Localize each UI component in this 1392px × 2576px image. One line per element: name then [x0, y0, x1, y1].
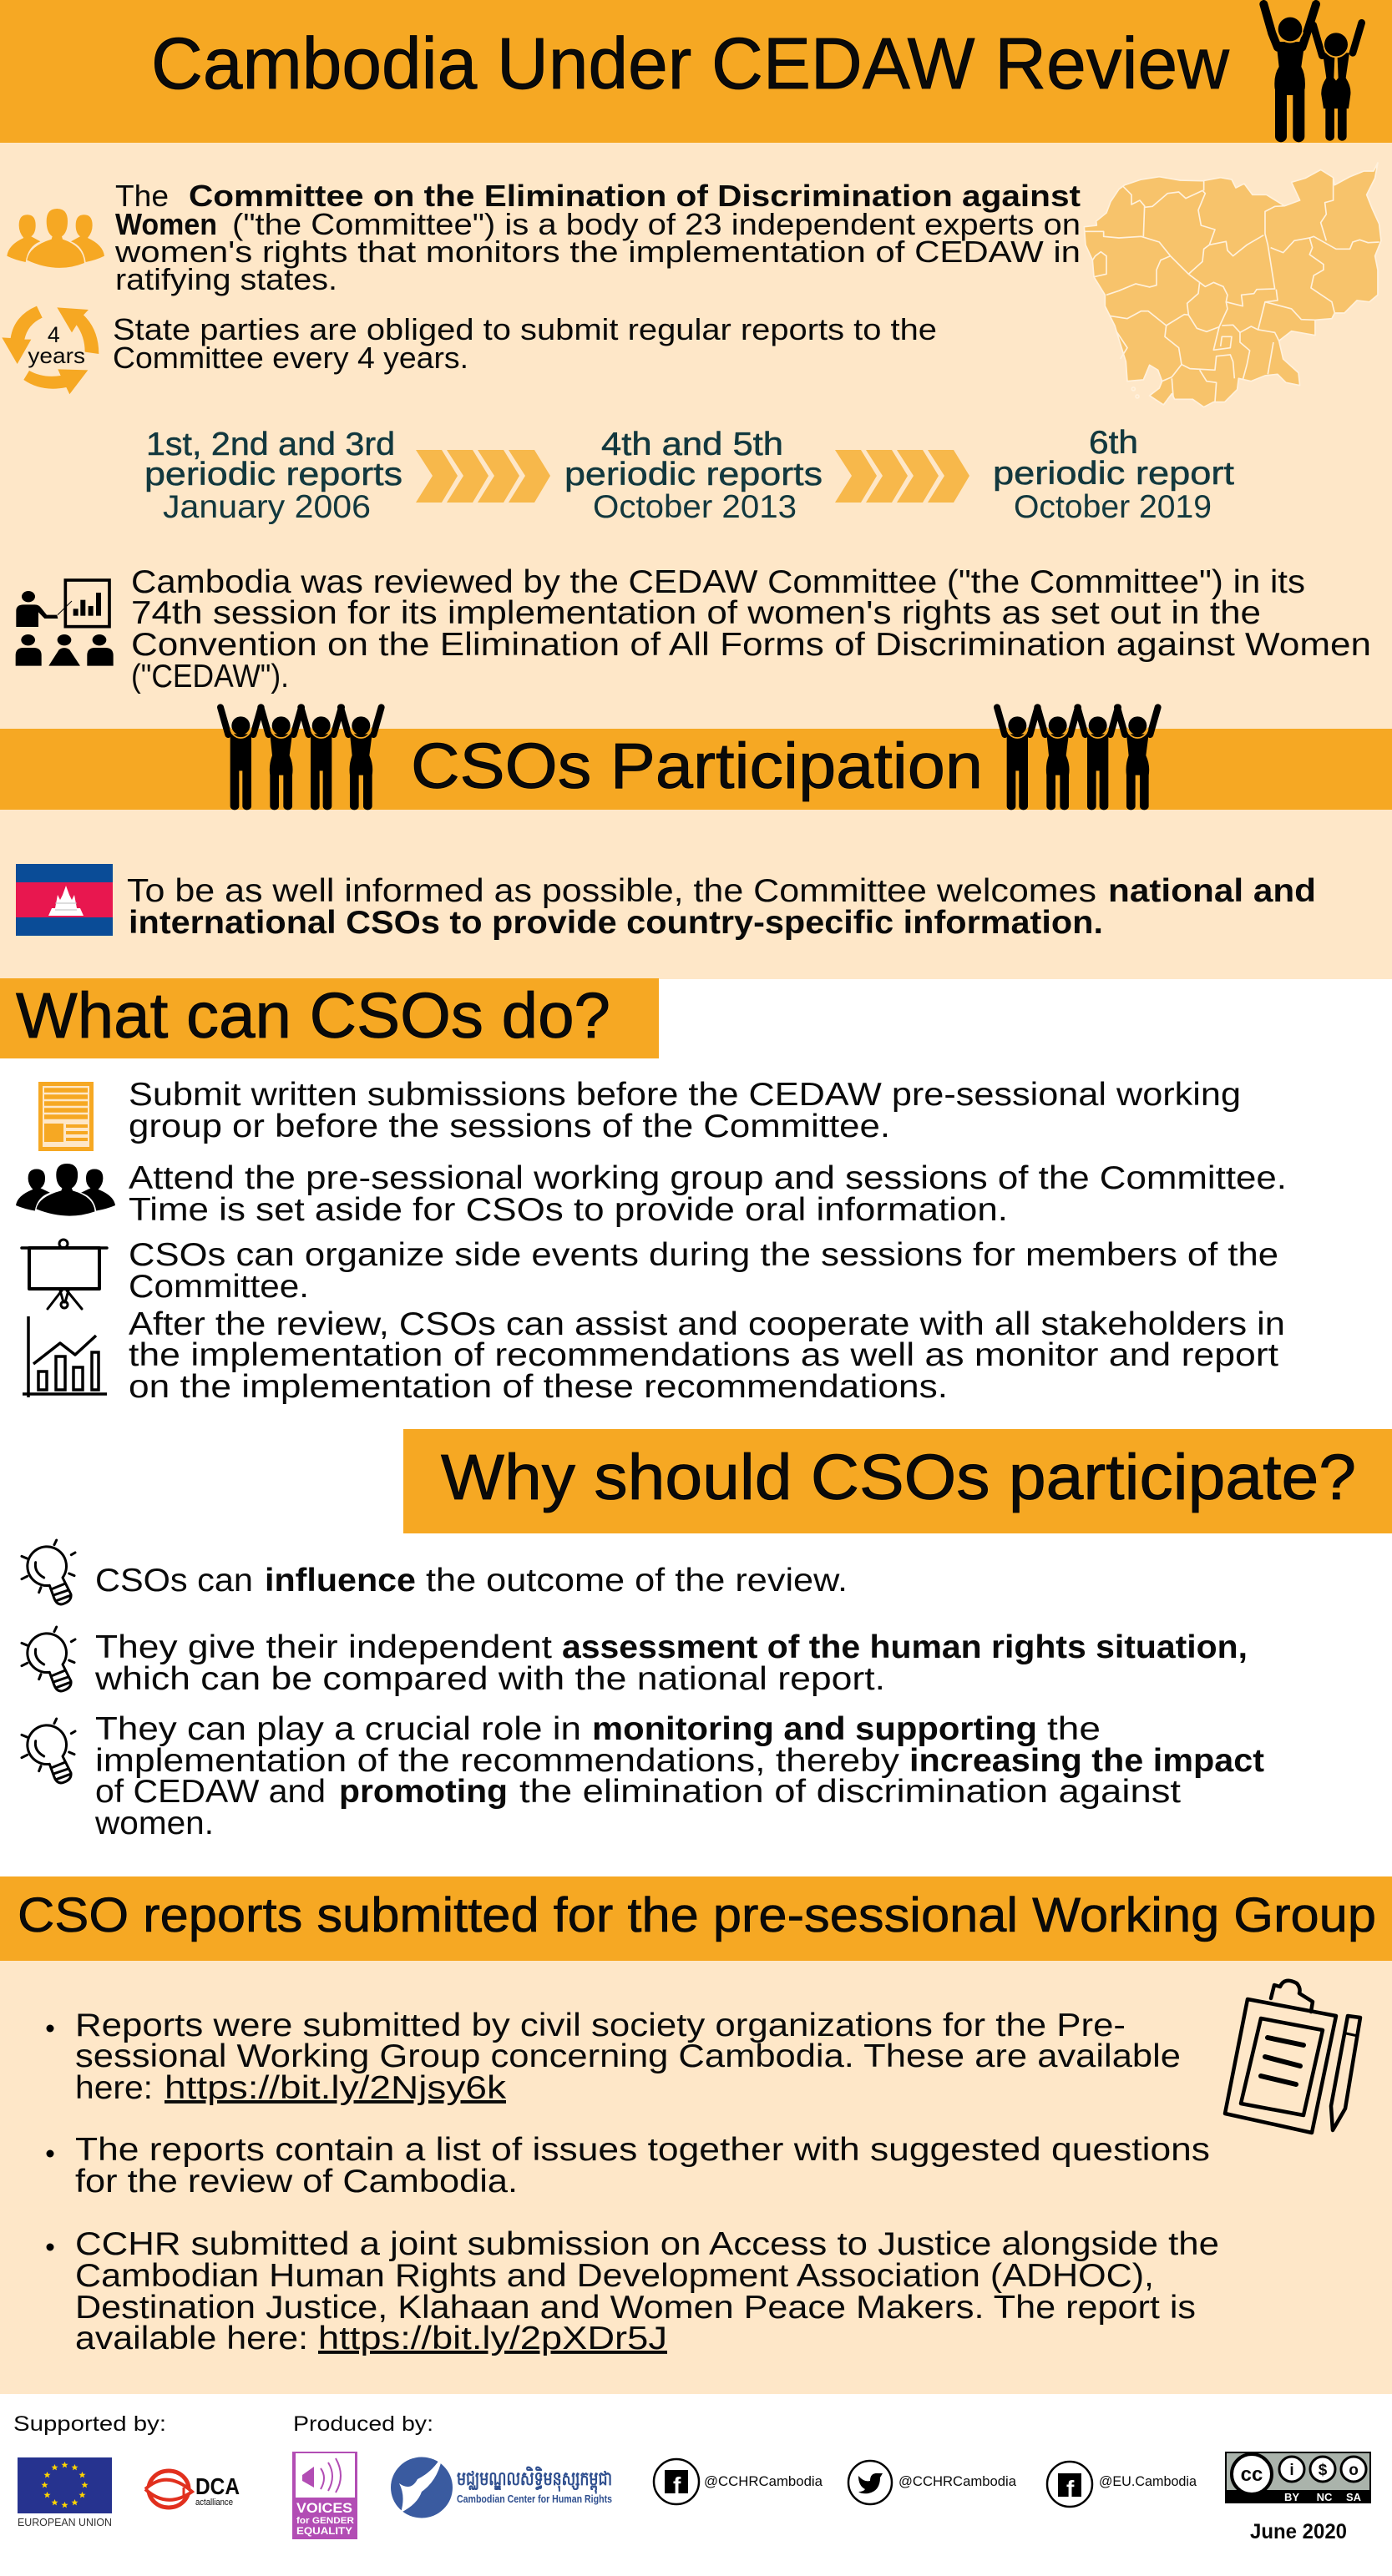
icon: four-year cycle	[2, 306, 99, 394]
text: committee description: ratifying states.	[115, 262, 337, 296]
text: produced by: Produced by:	[293, 2412, 433, 2436]
text: after the review	[129, 1306, 1285, 1405]
list: reports submitted	[47, 2008, 1181, 2106]
text: after the review: After the review, CSOs can assist and cooperate with all stakeholders in	[129, 1306, 1285, 1342]
timeline: reports 4 and 5	[564, 427, 823, 525]
icon: presentation and audience	[16, 580, 114, 666]
badge: Creative Commons BY NC SA: cc	[1241, 2463, 1263, 2486]
arrow: chevrons one	[416, 450, 550, 503]
text: attend sessions: Attend the pre-sessional working group and sessions of the Committee.	[129, 1160, 1287, 1196]
timeline: report 6: periodic report	[993, 456, 1234, 492]
banner: Why should CSOs participate	[403, 1429, 1392, 1533]
text: committee description: ("the Committee") is a body of 23 independent experts on	[232, 207, 1081, 241]
logo: European Union	[18, 2457, 112, 2528]
text: monitoring and supporting: the elimination of discrimination against	[519, 1774, 1181, 1810]
text: independent assessment: which can be compared with the national report.	[94, 1661, 885, 1697]
text: independent assessment: assessment of the human rights situation,	[562, 1629, 1248, 1665]
heading: CSOs Participation	[411, 730, 983, 802]
badge: Creative Commons BY NC SA: o	[1349, 2462, 1359, 2479]
list: CCHR joint submission: available here:	[75, 2321, 308, 2356]
text: committee welcomes information: national and	[1108, 873, 1316, 909]
timeline: reports 1 to 3	[144, 427, 402, 525]
logo: Voices for Gender Equality: VOICES	[296, 2500, 352, 2516]
text: after the review: the implementation of recommendations as well as monitor and report	[129, 1337, 1278, 1373]
text: review description: Convention on the Elimination of All Forms of Discrimination against Women	[131, 627, 1371, 663]
map of Cambodia	[1084, 163, 1381, 407]
logo: Voices for Gender Equality: EQUALITY	[296, 2525, 352, 2537]
text: supported by: Supported by:	[13, 2412, 166, 2436]
text: influence: influence	[265, 1563, 416, 1599]
text: monitoring and supporting: implementation of the recommendations, thereby	[95, 1743, 900, 1779]
heading: What can CSOs do?	[16, 980, 610, 1052]
text: committee description	[114, 179, 1081, 296]
social: EU Facebook: f	[1066, 2476, 1075, 2502]
text: committee welcomes information	[127, 873, 1316, 941]
text: monitoring and supporting: of CEDAW and	[95, 1774, 326, 1810]
text: committee description: women's rights that monitors the implementation of CEDAW in	[114, 235, 1081, 269]
text: side events: CSOs can organize side events during the sessions for members of the	[129, 1237, 1278, 1273]
badge: Creative Commons BY NC SA: NC	[1317, 2491, 1333, 2503]
badge: Creative Commons BY NC SA: i	[1289, 2462, 1294, 2479]
list: CCHR joint submission: Cambodian Human Rights and Development Association (ADHOC),	[75, 2258, 1154, 2294]
icon: two people with raised arms	[1263, 4, 1362, 142]
icon: committee group	[7, 209, 104, 268]
text: independent assessment	[94, 1629, 1248, 1697]
title banner	[0, 0, 1392, 143]
list: reports submitted: https://bit.ly/2Njsy6k	[165, 2070, 507, 2106]
timeline: report 6	[993, 425, 1234, 525]
text: monitoring and supporting: They can play a crucial role in	[95, 1711, 581, 1747]
list: CCHR joint submission: CCHR submitted a joint submission on Access to Justice alongside the	[75, 2226, 1219, 2262]
timeline: reports 4 and 5: periodic reports	[564, 457, 823, 492]
badge: Creative Commons BY NC SA: $	[1319, 2462, 1328, 2479]
text: committee description: Committee on the Elimination of Discrimination against	[189, 179, 1081, 213]
text: submit written submissions	[129, 1077, 1241, 1144]
icon: light bulb one	[22, 1540, 75, 1604]
logo: Cambodian Center for Human Rights	[391, 2454, 612, 2518]
banner: What can CSOs do	[0, 978, 659, 1058]
heading: Why should CSOs participate?	[441, 1442, 1356, 1513]
list: list of issues: for the review of Cambodia.	[75, 2164, 518, 2200]
text: influence: CSOs can	[95, 1563, 253, 1599]
icon: light bulb two	[22, 1627, 75, 1691]
text: committee welcomes information: international CSOs to provide country-specific information.	[129, 905, 1103, 941]
timeline: reports 1 to 3: 1st, 2nd and 3rd	[146, 427, 395, 462]
banner: CSOs Participation	[0, 729, 1392, 810]
text: monitoring and supporting: increasing the impact	[909, 1743, 1264, 1779]
text: independent assessment: They give their independent	[95, 1629, 552, 1665]
logo: European Union: EUROPEAN UNION	[18, 2516, 112, 2528]
badge: Creative Commons BY NC SA: BY	[1284, 2491, 1299, 2503]
text: monitoring and supporting	[94, 1711, 1264, 1841]
list: list of issues: The reports contain a list of issues together with suggested questions	[75, 2132, 1210, 2168]
logo: Voices for Gender Equality: for GENDER	[296, 2516, 354, 2526]
timeline: report 6: October 2019	[1014, 489, 1212, 525]
icon: attendees	[16, 1164, 115, 1216]
icon: four-year cycle: 4	[48, 322, 60, 347]
logo: Voices for Gender Equality	[292, 2452, 357, 2539]
text: review description: Cambodia was reviewed by the CEDAW Committee ("the Committee") in its	[131, 564, 1305, 600]
heading: CSO reports submitted for the pre-sessional Working Group	[18, 1888, 1376, 1942]
logo: Cambodian Center for Human Rights: មជ្ឈមណ្ឌលសិទ្ធិមនុស្សកម្ពុជា	[457, 2466, 612, 2494]
badge: Creative Commons BY NC SA: SA	[1346, 2491, 1362, 2503]
icon: monitoring chart	[23, 1316, 107, 1397]
timeline: reports 4 and 5: 4th and 5th	[601, 427, 783, 462]
timeline: reports 1 to 3: periodic reports	[144, 457, 402, 492]
text: monitoring and supporting: the	[1047, 1711, 1101, 1747]
icon: light bulb three	[22, 1719, 75, 1783]
social: CCHR Facebook	[654, 2459, 823, 2504]
icon: group of raised-arm figures left	[220, 707, 382, 810]
icon: clipboard and pencil	[1225, 1981, 1360, 2133]
text: monitoring and supporting: monitoring and supporting	[592, 1711, 1037, 1747]
icon: group of raised-arm figures right	[997, 707, 1158, 810]
text: submit written submissions: Submit written submissions before the CEDAW pre-sessional working	[129, 1077, 1241, 1113]
social: EU Facebook	[1047, 2462, 1197, 2507]
text: influence: the outcome of the review.	[426, 1563, 848, 1599]
text: reporting obligation: Committee every 4 years.	[113, 341, 468, 375]
text: monitoring and supporting: women.	[94, 1806, 214, 1841]
list: CCHR joint submission: Destination Justice, Klahaan and Women Peace Makers. The report is	[75, 2290, 1196, 2326]
text: side events	[129, 1237, 1278, 1305]
text: after the review: on the implementation of these recommendations.	[129, 1369, 948, 1405]
social: CCHR Twitter: @CCHRCambodia	[898, 2473, 1017, 2489]
social: CCHR Twitter	[848, 2461, 1017, 2504]
text: monitoring and supporting: promoting	[339, 1774, 508, 1810]
timeline: reports 4 and 5: October 2013	[593, 489, 797, 525]
social: CCHR Facebook: f	[673, 2472, 681, 2498]
text: attend sessions: Time is set aside for CSOs to provide oral information.	[129, 1192, 1008, 1228]
text: reporting obligation: State parties are obliged to submit regular reports to the	[113, 312, 937, 346]
logo: DCA actalliance: actalliance	[195, 2498, 233, 2508]
timeline: report 6: 6th	[1089, 425, 1138, 461]
list: CCHR joint submission	[47, 2226, 1219, 2356]
list: reports submitted: sessional Working Group concerning Cambodia. These are available	[75, 2038, 1181, 2074]
text: committee description: Women	[115, 207, 217, 241]
logo: DCA actalliance: DCA	[195, 2473, 240, 2499]
text: side events: Committee.	[129, 1269, 309, 1305]
text: reporting obligation	[113, 312, 937, 375]
arrow: chevrons two	[835, 450, 969, 503]
logo: DCA actalliance	[145, 2471, 240, 2508]
badge: Creative Commons BY NC SA	[1225, 2452, 1371, 2503]
list: CCHR joint submission: https://bit.ly/2pXDr5J	[318, 2321, 667, 2356]
timeline: reports 1 to 3: January 2006	[163, 489, 371, 525]
social: CCHR Facebook: @CCHRCambodia	[704, 2473, 823, 2489]
text: date: June 2020	[1250, 2520, 1347, 2543]
logo: Cambodian Center for Human Rights: Cambodian Center for Human Rights	[457, 2493, 612, 2505]
text: influence	[95, 1563, 848, 1599]
text: committee welcomes information: To be as well informed as possible, the Committee welcomes	[127, 873, 1096, 909]
text: review description	[131, 564, 1371, 695]
list: reports submitted: here:	[75, 2070, 153, 2106]
text: review description: 74th session for its implementation of women's rights as set out in the	[131, 595, 1261, 631]
text: submit written submissions: group or before the sessions of the Committee.	[129, 1109, 890, 1144]
icon: Cambodian flag	[16, 864, 113, 936]
text: attend sessions	[129, 1160, 1287, 1228]
banner: CSO reports	[0, 1876, 1392, 1961]
title: Cambodia Under CEDAW Review	[151, 23, 1230, 104]
list: reports submitted: Reports were submitted by civil society organizations for the Pre-	[75, 2008, 1126, 2043]
text: committee description: The	[115, 179, 169, 213]
icon: projection screen	[22, 1240, 107, 1309]
social: EU Facebook: @EU.Cambodia	[1099, 2473, 1197, 2489]
text: review description: ("CEDAW").	[131, 659, 289, 695]
icon: four-year cycle: years	[28, 343, 85, 368]
list: list of issues	[47, 2132, 1210, 2200]
icon: written submission document	[38, 1082, 94, 1151]
